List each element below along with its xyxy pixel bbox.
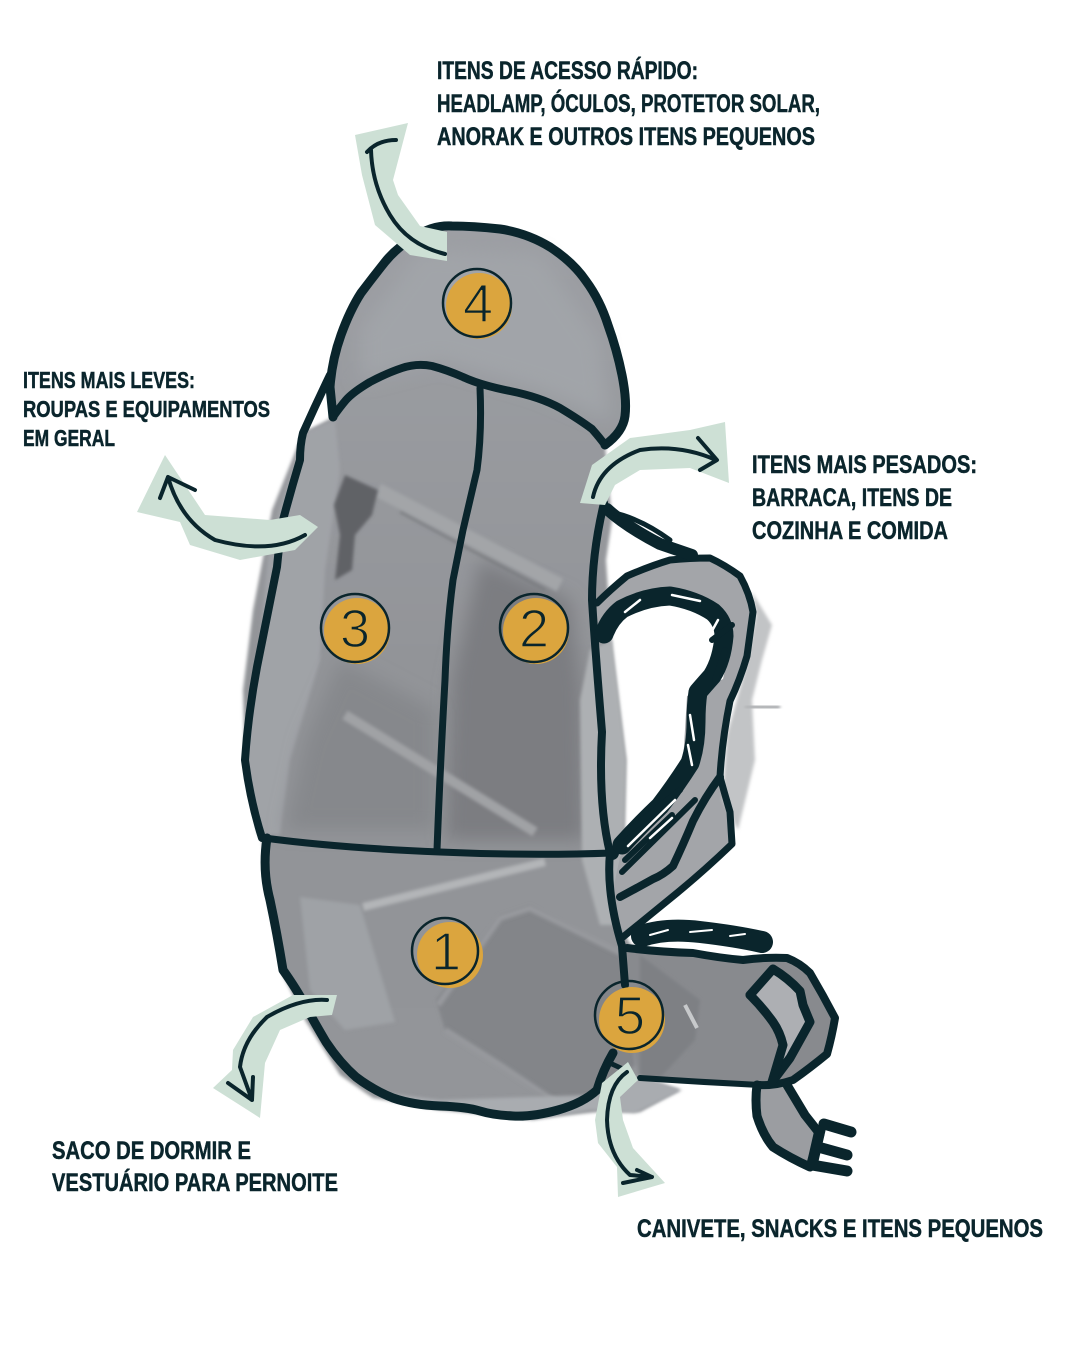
arrow stroke bbox=[160, 477, 305, 546]
badge ring bbox=[500, 594, 568, 662]
badge ring bbox=[443, 269, 511, 337]
digit: 5 bbox=[615, 986, 645, 1046]
hip loop inner bbox=[750, 995, 783, 1082]
arrow stroke bbox=[607, 1072, 652, 1183]
digit: 1 bbox=[431, 922, 461, 982]
text: quick access items: HEADLAMP, ÓCULOS, PROTETOR SOLAR, bbox=[437, 88, 820, 118]
scribble: top strap second line bbox=[610, 512, 670, 540]
text: quick access items: ANORAK E OUTROS ITENS PEQUENOS bbox=[437, 123, 815, 151]
side mesh pocket bbox=[300, 897, 395, 1030]
hip loop fill bbox=[755, 969, 810, 1076]
outline: lower compartment bbox=[265, 838, 613, 1116]
arrow stroke bbox=[367, 140, 445, 254]
text: lighter items bbox=[23, 367, 270, 451]
arrow: top pocket bbox=[355, 123, 447, 261]
arrow band bbox=[213, 995, 337, 1118]
text: sleeping bag: VESTUÁRIO PARA PERNOITE bbox=[52, 1168, 338, 1197]
lower diagonal strap bbox=[345, 715, 535, 832]
badge bbox=[599, 987, 665, 1053]
badge ring bbox=[412, 918, 478, 984]
text: sleeping bag bbox=[52, 1137, 338, 1197]
arrow band bbox=[580, 422, 729, 505]
badge bbox=[417, 922, 483, 988]
belt strap ends bbox=[812, 1124, 851, 1171]
text: lighter items: ITENS MAIS LEVES: bbox=[23, 367, 195, 393]
arrow stroke bbox=[593, 438, 717, 497]
hip belt fill bbox=[625, 946, 835, 1086]
scribble: white flecks bbox=[625, 595, 718, 846]
arrow: right side bbox=[580, 422, 729, 505]
outline: strap inner line bbox=[620, 777, 720, 897]
arrow band bbox=[595, 1062, 665, 1197]
text: heavier items: COZINHA E COMIDA bbox=[752, 517, 948, 545]
dark right lower compartment bbox=[445, 560, 585, 840]
zipper pull bbox=[685, 1005, 697, 1028]
arrow: hip pocket bbox=[595, 1062, 665, 1197]
hip loop outer bbox=[750, 969, 810, 1078]
number 3 bbox=[321, 594, 390, 664]
number 4 bbox=[443, 269, 512, 339]
belt zipper pocket bbox=[640, 955, 700, 1078]
badge bbox=[503, 598, 569, 664]
text: quick access items: ITENS DE ACESSO RÁPIDO: bbox=[437, 56, 698, 85]
webbing edge shadow bbox=[400, 512, 545, 590]
arrow: bottom bbox=[213, 995, 337, 1118]
pocket strap bbox=[363, 862, 545, 907]
badge ring bbox=[321, 594, 389, 662]
text: quick access items bbox=[437, 56, 820, 151]
scribble: strap hatching bbox=[620, 625, 732, 872]
belt strap tail bbox=[756, 1085, 820, 1167]
arrow stroke bbox=[228, 1000, 327, 1100]
badge bbox=[446, 273, 512, 339]
load lifter buckle bbox=[745, 706, 780, 708]
side webbing strap bbox=[378, 490, 560, 585]
shoulder strap fill bbox=[597, 558, 753, 937]
text: lighter items: ROUPAS E EQUIPAMENTOS bbox=[23, 396, 270, 422]
outline: horizontal divider bbox=[264, 838, 612, 854]
hip pocket bbox=[436, 905, 635, 1105]
back mesh pad bbox=[580, 640, 626, 925]
hip belt top line bbox=[627, 948, 835, 1085]
outline: top dome bbox=[330, 226, 626, 445]
pocket rim bbox=[438, 908, 625, 1105]
arrow band bbox=[137, 455, 318, 560]
text: heavier items: ITENS MAIS PESADOS: bbox=[752, 451, 977, 479]
top lid light panel bbox=[360, 250, 610, 420]
outline: back line bbox=[592, 503, 625, 985]
number 1 bbox=[412, 918, 483, 988]
arrow: left side bbox=[137, 455, 318, 560]
scribble: load strap flecks bbox=[650, 930, 745, 936]
base shadow bbox=[360, 1076, 682, 1120]
text: heavier items bbox=[752, 451, 977, 545]
digit: 2 bbox=[519, 599, 549, 659]
text: lighter items: EM GERAL bbox=[23, 425, 115, 451]
dark lower left compartment bbox=[285, 660, 435, 830]
scribble: upper strap bbox=[604, 596, 724, 845]
outline: left side bbox=[245, 375, 330, 838]
backpack photo bbox=[243, 226, 835, 1167]
scribble: top compression strap bbox=[607, 509, 692, 555]
number 5 bbox=[595, 981, 665, 1053]
outline: junction dot bbox=[605, 846, 619, 860]
text: heavier items: BARRACA, ITENS DE bbox=[752, 484, 952, 512]
compression buckle bbox=[334, 475, 378, 580]
digit: 4 bbox=[463, 274, 493, 334]
pack bottom connector bbox=[612, 1064, 625, 1070]
hand-drawn outlines bbox=[245, 226, 851, 1171]
digit: 3 bbox=[340, 599, 370, 659]
badge ring bbox=[595, 981, 663, 1049]
hip belt bottom line bbox=[640, 1078, 760, 1085]
badge bbox=[324, 598, 390, 664]
backpack body silhouette bbox=[243, 226, 700, 1119]
number 2 bbox=[500, 594, 569, 664]
scribble: lower load strap bbox=[642, 931, 762, 942]
belt strap tail fill bbox=[757, 1085, 820, 1167]
arrow band bbox=[355, 123, 447, 261]
text: sleeping bag: SACO DE DORMIR E bbox=[52, 1137, 251, 1165]
outline: lid flap bbox=[333, 365, 605, 445]
outline: vertical divider bbox=[437, 388, 481, 850]
outline: shoulder strap outer bbox=[597, 558, 753, 937]
pack left side panel bbox=[245, 420, 340, 835]
strap back padding bbox=[722, 592, 772, 830]
